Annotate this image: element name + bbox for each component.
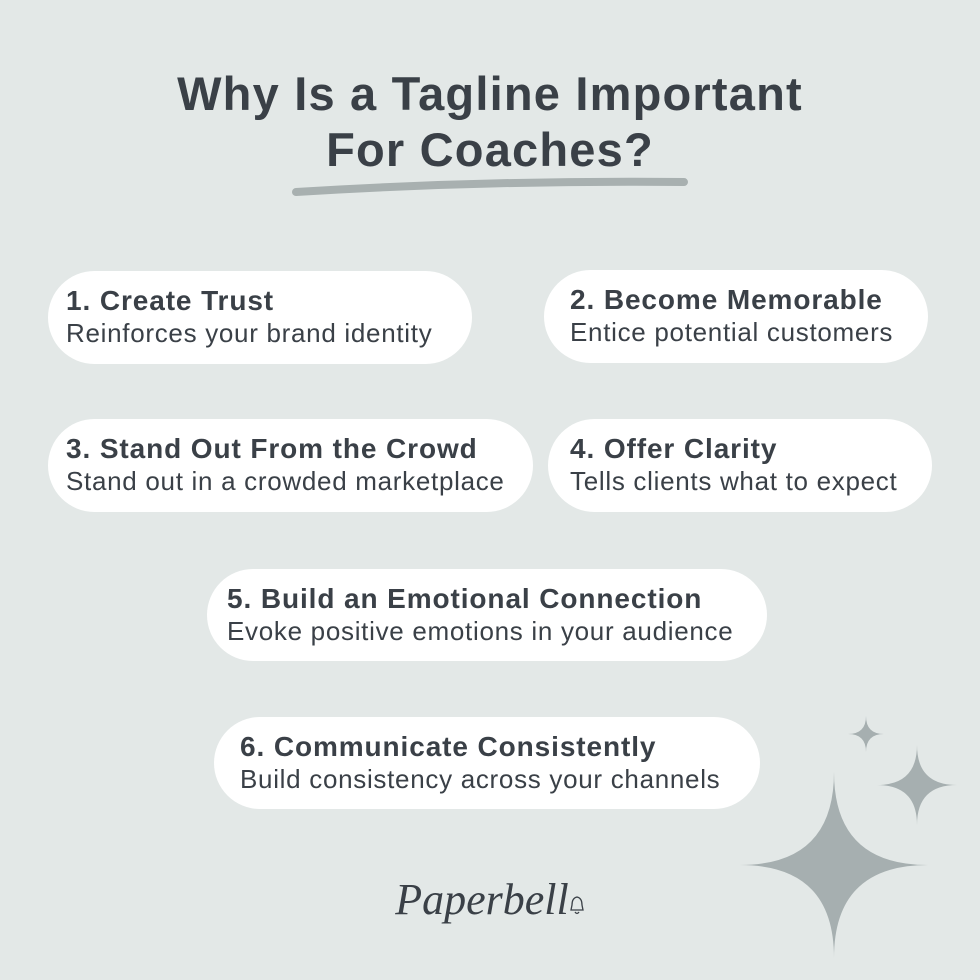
pill 3: 3. Stand Out From the Crowd [66,433,478,464]
pill 3: Stand out in a crowded marketplace [66,466,505,496]
title [177,67,803,176]
pill 4: 4. Offer Clarity [570,433,777,464]
pill 1: Reinforces your brand identity [66,318,432,348]
pill 3 [48,419,533,512]
pill 5 [207,569,767,661]
pill 1: 1. Create Trust [66,285,274,316]
pill 2: Entice potential customers [570,317,893,347]
pill 5: 5. Build an Emotional Connection [227,583,702,614]
pill 6: Build consistency across your channels [240,764,720,794]
logo: Paperbell [395,875,569,924]
title underline [292,178,688,196]
pill 2 [544,270,928,363]
pill 4: Tells clients what to expect [570,466,897,496]
pill 1 [48,271,472,364]
pill 5: Evoke positive emotions in your audience [227,616,733,646]
pill 4 [548,419,932,512]
title: For Coaches? [326,123,654,176]
pill 6: 6. Communicate Consistently [240,731,656,762]
pill 6 [214,717,760,809]
title: Why Is a Tagline Important [177,67,803,120]
pill 2: 2. Become Memorable [570,284,883,315]
